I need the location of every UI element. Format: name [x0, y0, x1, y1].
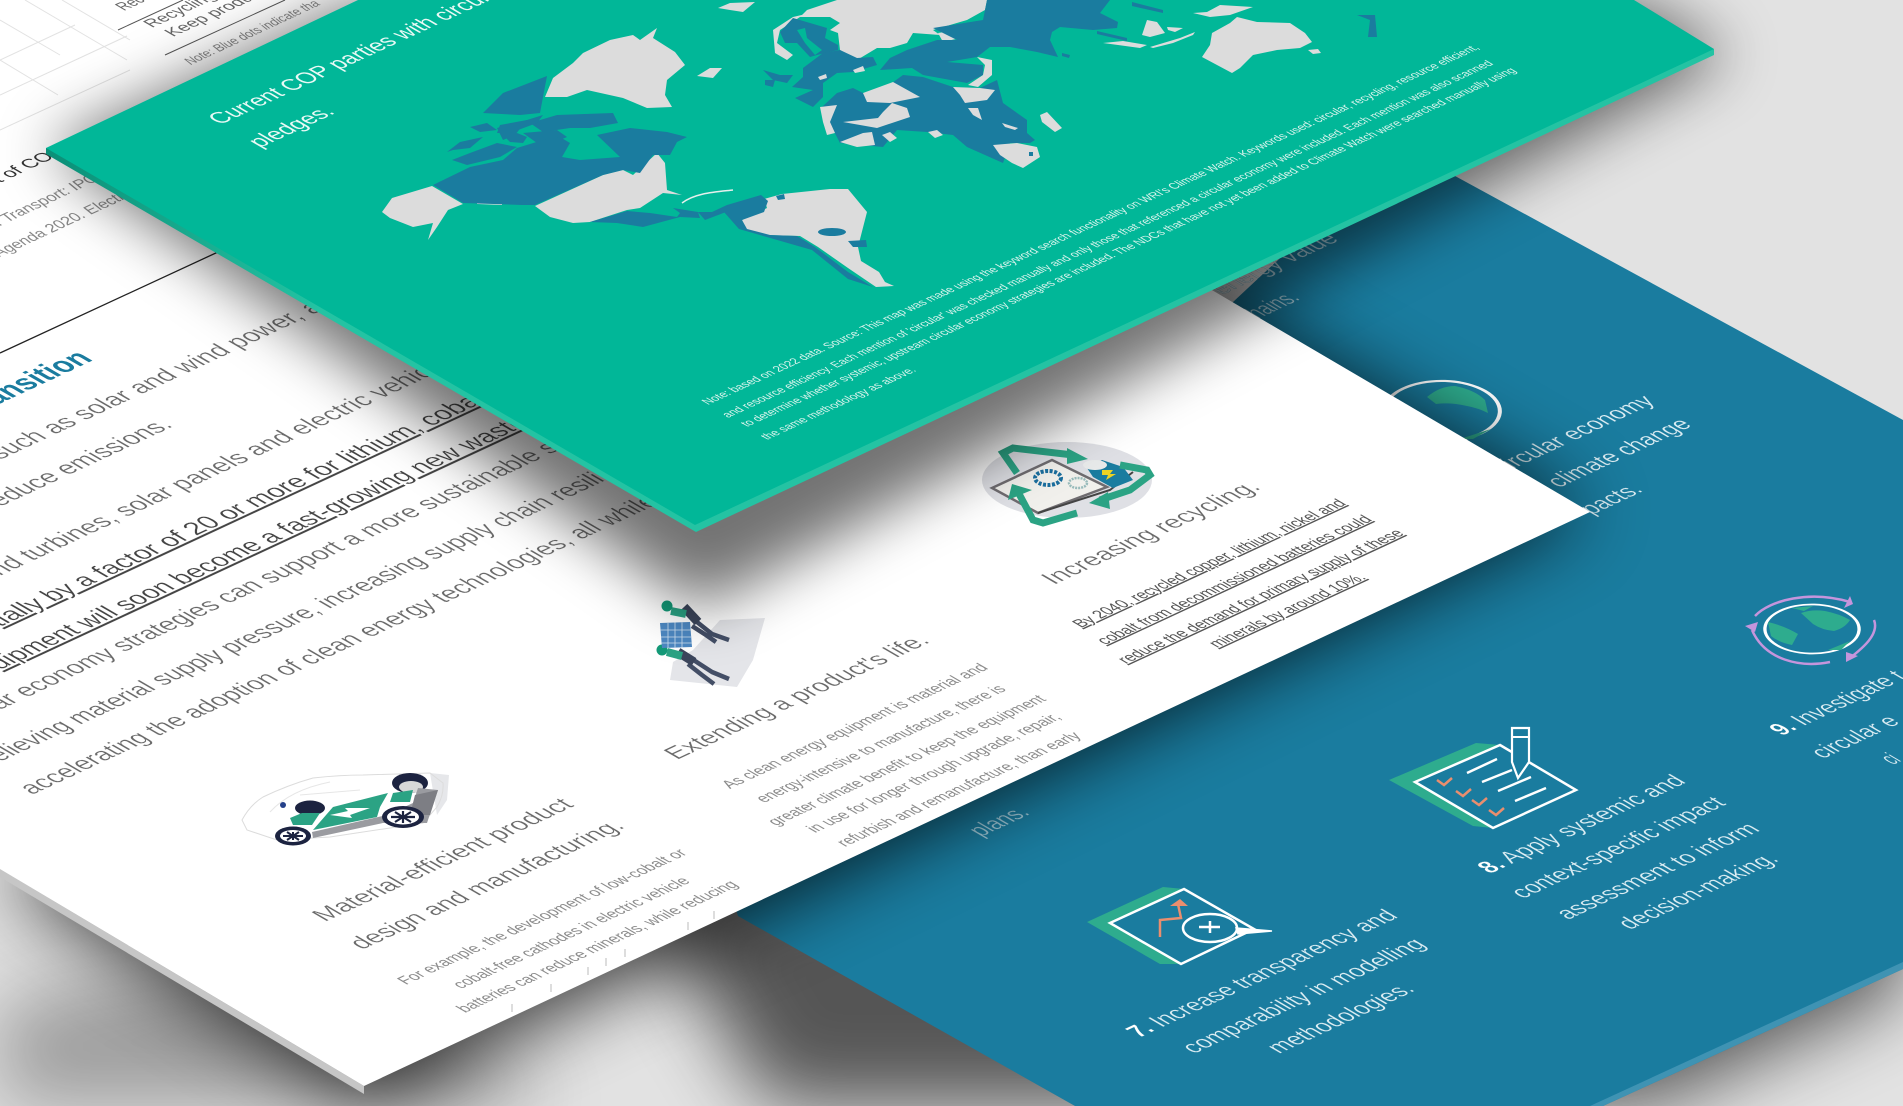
- text: recommendation 7: methodologies.: [1259, 979, 1421, 1057]
- icon: electric car chassis: [242, 773, 449, 846]
- text: recommendation 7: 7. Increase transparency and: [1119, 906, 1404, 1041]
- map: blue countries: [433, 0, 1377, 287]
- table fragments and notes: [0, 0, 324, 260]
- panel: blue recommendations page: [700, 146, 1903, 1106]
- text: plans: plans.: [961, 802, 1036, 840]
- text: recommendation 8: decision-making.: [1610, 849, 1785, 933]
- table grid: [0, 0, 130, 130]
- icon: globe with circular arrows: [1745, 594, 1878, 664]
- text: energy value chains: [1202, 229, 1345, 322]
- text: energy value chains: energy value: [1202, 229, 1345, 298]
- text: energy transition body: accelerating the adoption of clean energy technologies, all while: [12, 491, 666, 798]
- text: recommendation 8: assessment to inform: [1548, 819, 1766, 923]
- text: map note and source: and resource efficiency. Each mention of 'circular' was checked manually and only those that referenced a circular economy were included. Each mention was also scanned: [719, 59, 1497, 420]
- heading: material-efficient product design: Material-efficient product: [305, 794, 581, 925]
- text: material-efficient body: [394, 846, 743, 1015]
- text: circular economy climate change impacts: ircular economy: [1493, 391, 1661, 472]
- text: extending life body: [718, 661, 1086, 849]
- text: recycling body underlined: cobalt from decommissioned batteries could: [1093, 513, 1377, 647]
- text: recommendation 8: 8. Apply systemic and: [1470, 771, 1692, 877]
- heading: material-efficient product design: design and manufacturing.: [342, 816, 632, 953]
- text: extending life body: in use for longer through upgrade, repair,: [803, 711, 1066, 835]
- icon: globe: [1360, 369, 1524, 453]
- text: map note and source: to determine whether systemic, upstream circular economy strategies are included. The NDCs that have not yet been added to Climate Watch were searched manually using: [738, 66, 1520, 429]
- map: grey countries over Africa and Asia: [818, 5, 1321, 168]
- text: recommendation 7: comparability in modelling: [1174, 934, 1432, 1057]
- text: recommendation 9: circular e: [1803, 711, 1903, 762]
- text: extending life body: As clean energy equipment is material and: [718, 661, 993, 791]
- heading: extending a product's life: Extending a product's life.: [657, 630, 937, 763]
- text: recommendation 8: context-specific impact: [1503, 792, 1732, 902]
- text: material-efficient body: cobalt-free cathodes in electric vehicle: [449, 875, 695, 991]
- text: recycling body underlined: By 2040, recycled copper, lithium, nickel and: [1069, 497, 1351, 630]
- text: energy value chains: hains.: [1238, 288, 1306, 322]
- map: grey countries: [382, 0, 1060, 287]
- icon: chart under magnifier: [1087, 887, 1272, 964]
- text: circular economy climate change impacts: climate change: [1539, 414, 1698, 491]
- text: extending life body: greater climate benefit to keep the equipment: [764, 693, 1051, 828]
- icon: workers carrying solar panel: [656, 600, 765, 687]
- text: map note and source: the same methodology as above.: [758, 365, 920, 442]
- heading: material-efficient product design: [305, 794, 632, 953]
- text: circular economy climate change impacts: [1493, 391, 1698, 518]
- icon: checklist and pencil: [1389, 728, 1576, 828]
- icon: recycling arrows around laptop and battery: [982, 442, 1152, 523]
- heading: COP pledges: pledges.: [241, 102, 341, 151]
- heading: increasing recycling: Increasing recycling.: [1034, 477, 1268, 588]
- text: energy transition body: [0, 297, 666, 798]
- text: extending life body: refurbish and remanufacture, than early: [833, 730, 1086, 849]
- text: extending life body: energy-intensive to manufacture, there is: [752, 683, 1011, 805]
- text: recycling body underlined: minerals by around 10%.: [1205, 571, 1371, 650]
- panel: green map page: [46, 0, 1714, 532]
- text: recycling body underlined: [1069, 497, 1409, 666]
- text: material-efficient body: batteries can reduce minerals, while reducing: [453, 878, 743, 1015]
- text: recommendation 8: [1470, 771, 1785, 933]
- world map: [382, 0, 1377, 287]
- text: circular economy climate change impacts: pacts.: [1572, 479, 1649, 518]
- text: recycling body underlined: reduce the demand for primary supply of these: [1114, 527, 1409, 666]
- text: material-efficient body: For example, the development of low-cobalt or: [394, 846, 692, 987]
- map: green inland patches: [797, 28, 822, 55]
- text: map note and source: Note: based on 2022 data. Source: This map was made using the keyword search functionality on WRI's Climate Watch. Keywords used: circular, recycling, resource efficient,: [699, 43, 1483, 407]
